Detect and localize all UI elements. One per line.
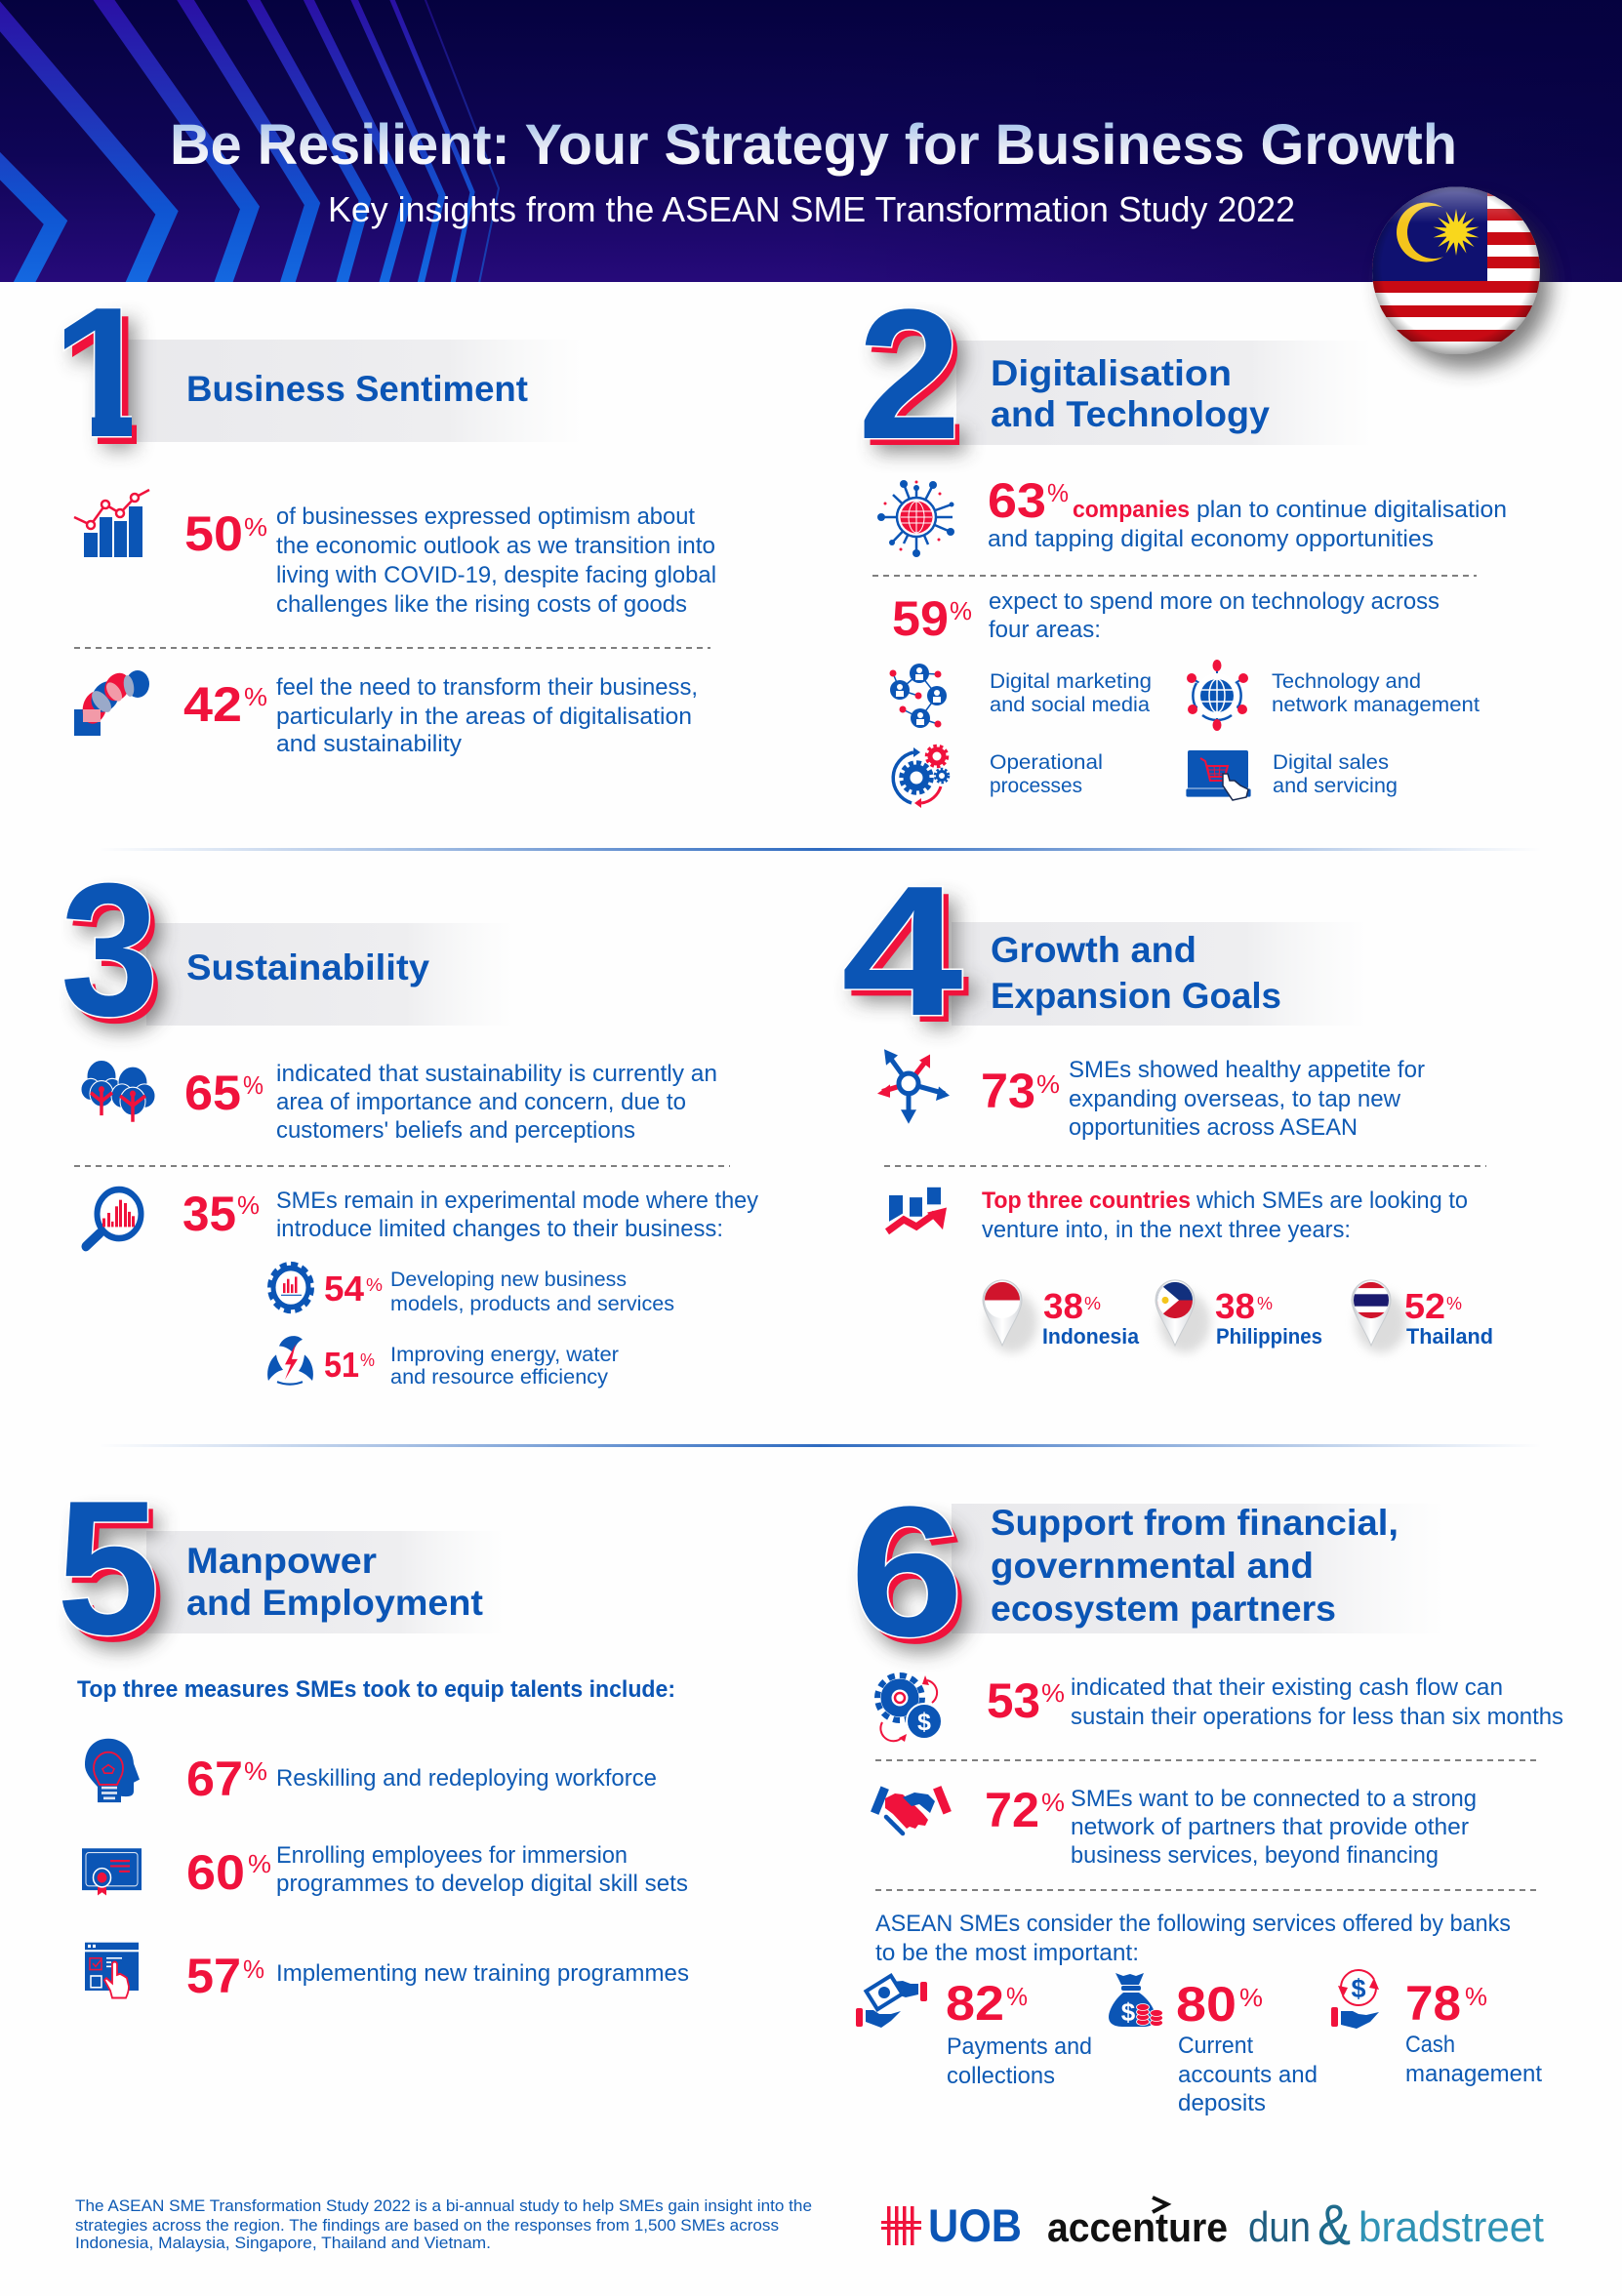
icon: rising bar chart: [74, 490, 149, 557]
icon: operational gears: [893, 745, 949, 808]
stat: 59 percent: 59: [892, 591, 949, 646]
section heading 4: 4: [848, 855, 970, 1062]
label: operational processes: [990, 750, 1103, 797]
stat: 80 percent accounts: %: [1239, 1983, 1263, 2012]
stat: 78 percent cash management: management: [1405, 2061, 1542, 2087]
section heading 3: 3: [72, 857, 170, 1068]
stat: Thailand 52 percent: 52: [1404, 1286, 1445, 1326]
stat: Indonesia 38 percent: %: [1084, 1294, 1101, 1313]
stat: 35 percent: SMEs remain in experimental mode where they: [276, 1188, 758, 1214]
stat: 63 percent: companies: [1073, 497, 1190, 523]
stat: 82 percent payments: 82: [946, 1976, 1004, 2031]
label: technology and network management: Technology and: [1272, 669, 1421, 693]
icon: laptop shopping cart: [1186, 750, 1251, 800]
stat: 60 percent: %: [248, 1849, 271, 1878]
icon: transformation chain: [74, 668, 149, 736]
section heading 4: 4: [841, 848, 963, 1055]
stat: 35 percent: 35: [182, 1187, 236, 1241]
section heading 3: Sustainability: [186, 947, 429, 987]
stat: 51 percent: Improving energy, water: [390, 1343, 619, 1366]
label: digital sales and servicing: Digital sales: [1273, 750, 1389, 774]
title: Be Resilient: Your Strategy for Business Growth: [170, 113, 1457, 177]
stat: Thailand 52 percent: [1404, 1286, 1493, 1349]
panel: 5 Manpower and Employment: [57, 1460, 689, 2003]
icon: handshake: [871, 1786, 952, 1833]
section heading 4: Growth and: [991, 930, 1196, 970]
icon: gear and dollar: [877, 1675, 942, 1742]
stat: 54 percent: 54: [324, 1269, 364, 1309]
text: bank services intro: to be the most important:: [875, 1940, 1139, 1966]
stat: 72 percent: [985, 1783, 1477, 1869]
icon: technology globe: [1187, 660, 1248, 731]
stat: 50 percent: %: [244, 512, 267, 542]
section heading 2: 2: [858, 271, 961, 478]
label: digital sales and servicing: and servicing: [1273, 774, 1398, 797]
stat: Philippines 38 percent: [1215, 1286, 1322, 1349]
stat: 57 percent: 57: [186, 1949, 241, 2003]
stat: 67 percent: 67: [186, 1752, 243, 1806]
icon: growth bars and arrow: [887, 1188, 947, 1231]
subtitle: Key insights from the ASEAN SME Transformation Study 2022: [328, 189, 1295, 229]
stat: 59 percent: [892, 588, 1440, 646]
section heading 1: [61, 308, 527, 463]
stat: 53 percent: %: [1041, 1678, 1065, 1708]
label: operational processes: processes: [990, 774, 1082, 797]
panel: 1 Business Sentiment: [52, 269, 716, 757]
stat: Philippines 38 percent: 38: [1215, 1286, 1255, 1326]
icon: payment hands: [856, 1976, 927, 2028]
stat: 65 percent: %: [243, 1070, 264, 1100]
stat: 35 percent: [182, 1187, 758, 1242]
stat: 72 percent: 72: [985, 1783, 1039, 1837]
section heading 6: 6: [862, 1483, 975, 1690]
stat: 42 percent: %: [244, 682, 267, 711]
stat: 60 percent: 60: [186, 1845, 245, 1900]
stat: 59 percent: expect to spend more on technology across: [989, 588, 1440, 615]
stat: 63 percent: 63: [988, 473, 1046, 528]
stat: 80 percent accounts: deposits: [1178, 2090, 1266, 2116]
stat: 54 percent: %: [366, 1275, 383, 1295]
stat: 63 percent: and tapping digital economy opportunities: [988, 526, 1434, 552]
panel: 2 Digitalisation and Technology: [858, 271, 1507, 808]
stat: 72 percent: SMEs want to be connected to a strong: [1071, 1786, 1477, 1812]
section heading 4: 4: [854, 861, 976, 1067]
icon: gear with chart: [269, 1265, 312, 1310]
subheading: top three measures: Top three measures SMEs took to equip talents include:: [77, 1676, 675, 1703]
stat: 72 percent: %: [1041, 1788, 1065, 1817]
label: operational processes: Operational: [990, 750, 1103, 774]
stat: 65 percent: 65: [184, 1066, 241, 1120]
stat: 50 percent: of businesses expressed optimism about: [276, 504, 695, 530]
stat: 51 percent: [324, 1343, 619, 1389]
chevron pattern: [0, 0, 499, 288]
stat: 51 percent: and resource efficiency: [390, 1365, 608, 1389]
stat: 78 percent cash management: %: [1465, 1982, 1487, 2011]
stat: 73 percent: [981, 1057, 1425, 1141]
stat: 53 percent: [987, 1673, 1563, 1730]
footnote: Indonesia, Malaysia, Singapore, Thailand and Vietnam.: [75, 2235, 491, 2252]
section heading 5: Manpower: [186, 1541, 377, 1581]
stat: 42 percent: [183, 674, 698, 757]
stat: 59 percent: %: [950, 596, 972, 625]
section heading 3: [61, 843, 517, 1068]
panel: 3 Sustainability: [61, 843, 758, 1389]
stat: 60 percent: [186, 1842, 688, 1900]
section heading 1: 1: [52, 269, 155, 476]
icon: certificate: [82, 1848, 142, 1895]
text: bank services intro: ASEAN SMEs consider the following services offered by banks: [875, 1911, 1511, 1937]
logo: dun and bradstreet: dun: [1248, 2203, 1311, 2251]
footnote: [75, 2197, 812, 2252]
map pin: Thailand: [1352, 1280, 1406, 1352]
stat: 53 percent: sustain their operations for less than six months: [1071, 1704, 1563, 1730]
label: digital marketing: [990, 669, 1152, 716]
stat: 63 percent: plan to continue digitalisation: [1196, 497, 1507, 523]
stat: 50 percent: 50: [184, 506, 243, 561]
stat: 80 percent accounts: 80: [1176, 1977, 1237, 2032]
stat: 51 percent: %: [360, 1350, 375, 1370]
stat: 57 percent: Implementing new training programmes: [276, 1960, 689, 1987]
stat: 54 percent: Developing new business: [390, 1268, 627, 1291]
stat: 60 percent: programmes to develop digital skill sets: [276, 1871, 688, 1897]
icon: digital globe network: [877, 480, 954, 557]
stat: 78 percent cash management: [1405, 1976, 1542, 2087]
section heading 1: 1: [60, 277, 163, 484]
stat: 72 percent: business services, beyond financing: [1071, 1842, 1439, 1869]
icon: Malaysia flag badge: [1372, 183, 1551, 369]
stat: 82 percent payments: [946, 1976, 1092, 2089]
stat: Thailand 52 percent: %: [1446, 1294, 1462, 1313]
logo: dun and bradstreet: [1248, 2194, 1544, 2257]
stat: 72 percent: network of partners that provide other: [1071, 1814, 1469, 1840]
logo: dun and bradstreet: &: [1318, 2194, 1351, 2257]
section heading 3: 3: [66, 850, 164, 1062]
section heading 5: [57, 1460, 507, 1688]
stat: 57 percent: %: [243, 1954, 264, 1984]
icon: cash management hand: $: [1351, 1974, 1366, 2003]
icon: cash management hand: [1331, 1970, 1379, 2029]
footnote: strategies across the region. The findings are based on the responses from 1,500 SMEs across: [75, 2217, 779, 2235]
stat: 65 percent: customers' beliefs and perceptions: [276, 1117, 635, 1144]
stat: 42 percent: and sustainability: [276, 731, 462, 757]
stat: 35 percent: %: [237, 1190, 260, 1220]
icon: trees with figures: [81, 1060, 155, 1122]
section heading 6: Support from financial,: [991, 1503, 1399, 1543]
stat: 63 percent: %: [1047, 478, 1069, 507]
section heading 4: Expansion Goals: [991, 976, 1281, 1016]
top three countries text: which SMEs are looking to: [1196, 1188, 1468, 1214]
section heading 2: 2: [864, 278, 967, 485]
stat: 65 percent: indicated that sustainability is currently an: [276, 1061, 717, 1087]
section heading 6: ecosystem partners: [991, 1589, 1336, 1629]
stat: 63 percent: [988, 473, 1507, 552]
stat: 78 percent cash management: 78: [1405, 1976, 1461, 2031]
logo: dun and bradstreet: bradstreet: [1358, 2203, 1544, 2251]
section heading 2: Digitalisation: [991, 353, 1232, 393]
stat: 80 percent accounts: accounts and: [1178, 2062, 1318, 2088]
label: digital marketing: Digital marketing: [990, 669, 1152, 693]
icon: gear and dollar: $: [917, 1709, 931, 1736]
panel: 6 Support from partners: [850, 1469, 1563, 2116]
icon: head with lightbulb: [85, 1739, 140, 1802]
stat: 54 percent: [324, 1268, 674, 1315]
stat: 73 percent: %: [1036, 1069, 1060, 1099]
stat: 42 percent: particularly in the areas of digitalisation: [276, 704, 692, 730]
panel: 4 Growth and Expansion Goals: [841, 848, 1493, 1352]
stat: 59 percent: four areas:: [989, 617, 1101, 643]
stat: 50 percent: challenges like the rising costs of goods: [276, 591, 687, 618]
stat: 57 percent: [186, 1949, 689, 2003]
stat: 42 percent: 42: [183, 677, 242, 732]
map pin: Indonesia: [983, 1280, 1037, 1352]
stat: Philippines 38 percent: Philippines: [1216, 1324, 1322, 1349]
stat: Indonesia 38 percent: 38: [1043, 1286, 1083, 1326]
logo: accenture: accenture: [1047, 2204, 1228, 2250]
logo: UOB: [881, 2199, 1022, 2251]
text: bank services intro: [875, 1911, 1511, 1966]
map pin: Philippines: [1156, 1280, 1210, 1352]
logo: UOB: UOB: [928, 2199, 1022, 2251]
top three countries text: [982, 1188, 1468, 1243]
section heading 5: and Employment: [186, 1583, 483, 1623]
label: technology and network management: [1272, 669, 1480, 716]
stat: 78 percent cash management: Cash: [1405, 2032, 1455, 2058]
stat: Indonesia 38 percent: Indonesia: [1042, 1324, 1140, 1349]
icon: money bag and coins: $: [1121, 1997, 1136, 2027]
stat: 73 percent: 73: [981, 1064, 1035, 1118]
stat: 50 percent: [184, 504, 716, 618]
stat: 50 percent: living with COVID-19, despite facing global: [276, 562, 716, 588]
section heading 3: 3: [61, 843, 158, 1055]
stat: 80 percent accounts: Current: [1178, 2033, 1253, 2059]
icon: recycle energy leaves: [267, 1336, 313, 1385]
stat: 35 percent: introduce limited changes to their business:: [276, 1216, 723, 1242]
stat: 82 percent payments: Payments and: [947, 2034, 1092, 2060]
stat: 51 percent: 51: [324, 1345, 359, 1385]
section heading 5: 5: [57, 1460, 160, 1674]
label: technology and network management: network management: [1272, 693, 1480, 716]
section heading 2: 2: [870, 285, 973, 492]
label: digital sales and servicing: [1273, 750, 1398, 797]
icon: magnifier with bars: [86, 1189, 141, 1246]
section heading 2: [858, 271, 1376, 492]
stat: 65 percent: [184, 1061, 717, 1144]
top three countries text: venture into, in the next three years:: [982, 1217, 1351, 1243]
section heading 4: [841, 848, 1371, 1067]
section heading 2: and Technology: [991, 394, 1270, 434]
stat: 53 percent: 53: [987, 1673, 1040, 1728]
stat: 60 percent: Enrolling employees for immersion: [276, 1842, 628, 1869]
icon: expansion arrows: [877, 1049, 950, 1124]
footnote: The ASEAN SME Transformation Study 2022 is a bi-annual study to help SMEs gain insight into the: [75, 2197, 812, 2215]
section heading 6: [850, 1469, 1449, 1690]
stat: 53 percent: indicated that their existing cash flow can: [1071, 1674, 1503, 1701]
label: digital marketing: and social media: [990, 693, 1150, 716]
stat: 73 percent: opportunities across ASEAN: [1069, 1114, 1358, 1141]
stat: 67 percent: [186, 1752, 657, 1806]
section heading 5: 5: [62, 1467, 166, 1681]
stat: 42 percent: feel the need to transform their business,: [276, 674, 698, 701]
stat: 82 percent payments: %: [1006, 1982, 1028, 2011]
stat: 65 percent: area of importance and concern, due to: [276, 1089, 686, 1115]
stat: Indonesia 38 percent: [1042, 1286, 1140, 1349]
section heading 6: governmental and: [991, 1546, 1314, 1586]
stat: 82 percent payments: collections: [947, 2063, 1055, 2089]
header banner: [0, 0, 1622, 288]
section heading 5: 5: [68, 1473, 172, 1688]
stat: 67 percent: %: [244, 1756, 267, 1786]
stat: 54 percent: models, products and services: [390, 1292, 674, 1315]
section heading 6: 6: [850, 1469, 963, 1675]
top three countries text: Top three countries: [982, 1188, 1191, 1214]
stat: 73 percent: expanding overseas, to tap new: [1069, 1086, 1401, 1112]
stat: 50 percent: the economic outlook as we transition into: [276, 533, 715, 559]
icon: people network: [890, 664, 947, 728]
stat: 73 percent: SMEs showed healthy appetite for: [1069, 1057, 1425, 1083]
stat: Thailand 52 percent: Thailand: [1406, 1324, 1493, 1349]
icon: browser training page: [85, 1943, 139, 1997]
section heading 6: 6: [856, 1475, 969, 1682]
stat: 67 percent: Reskilling and redeploying workforce: [276, 1765, 657, 1792]
section heading 1: Business Sentiment: [186, 369, 528, 409]
stat: 80 percent accounts: [1176, 1977, 1318, 2116]
icon: money bag and coins: [1109, 1973, 1163, 2027]
stat: Philippines 38 percent: %: [1257, 1294, 1273, 1313]
